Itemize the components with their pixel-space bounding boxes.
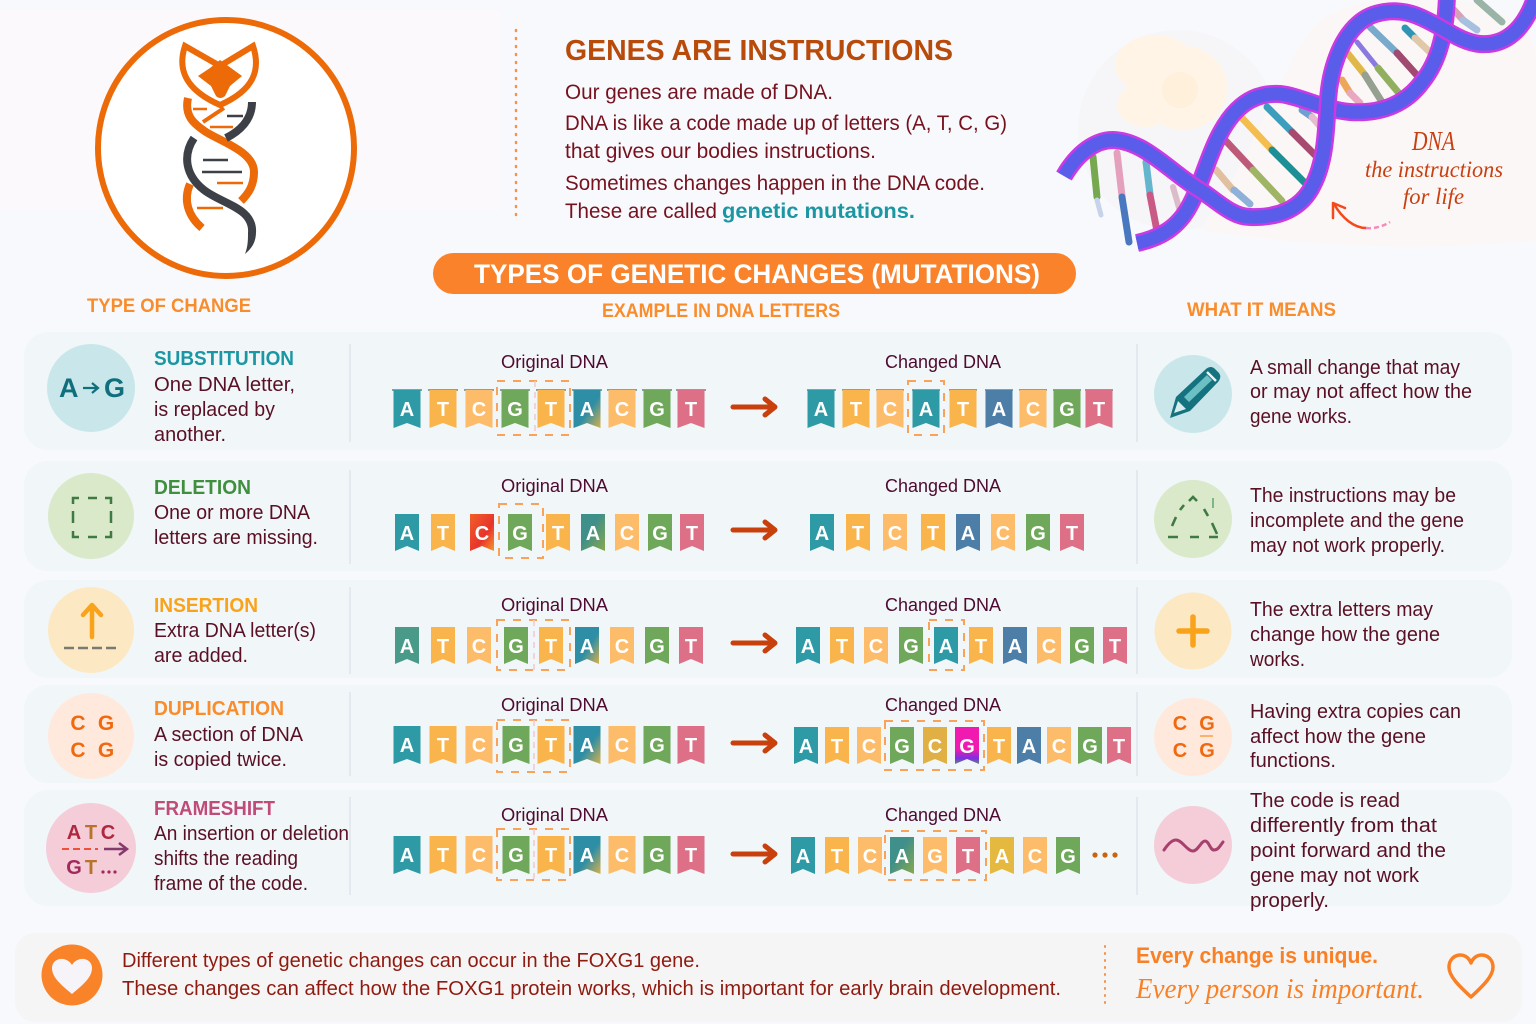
flags: changed sequence: [796, 627, 1127, 664]
text: frameshift meaning: [1250, 790, 1446, 912]
flags: original sequence: A: [400, 845, 414, 867]
flags: original sequence: G: [512, 523, 528, 545]
flags: changed sequence: [794, 727, 1131, 764]
text: deletion meaning: may not work properly.: [1250, 535, 1445, 557]
flags: original sequence: [392, 390, 706, 428]
icon: dashed triangle: [1154, 480, 1232, 558]
flags: changed sequence: A: [1008, 636, 1022, 658]
text: FOXG1 note: [122, 950, 1061, 1000]
flags: original sequence: C: [472, 735, 486, 757]
flags: original sequence: T: [437, 399, 449, 421]
icon: C G pairs meaning: G: [1199, 740, 1215, 762]
icon: reading frame shift: G: [66, 857, 82, 879]
flags: changed sequence: T: [993, 736, 1005, 758]
flags: changed sequence: C: [928, 736, 942, 758]
flags: original sequence: G: [649, 636, 665, 658]
flags: changed sequence: G: [1074, 636, 1090, 658]
flags: original sequence: A: [400, 523, 414, 545]
text: deletion meaning: [1250, 485, 1464, 557]
text: closing message: Every change is unique.: [1136, 943, 1378, 968]
intro text block: Sometimes changes happen in the DNA code.: [565, 172, 985, 195]
flags: original sequence: A: [400, 399, 414, 421]
text: insertion: are added.: [154, 645, 248, 667]
intro text block: DNA is like a code made up of letters (A, T, C, G): [565, 112, 1007, 135]
arrow: [733, 735, 775, 751]
text: deletion: One or more DNA: [154, 502, 311, 524]
text: frameshift meaning: The code is read: [1250, 790, 1400, 812]
flags: changed sequence: T: [1109, 636, 1121, 658]
icon: A to G: G: [104, 373, 125, 403]
text: insertion meaning: change how the gene: [1250, 624, 1440, 646]
text: substitution meaning: [1250, 357, 1472, 428]
flags: original sequence: A: [400, 636, 414, 658]
flags: original sequence: T: [437, 735, 449, 757]
text: closing message: [1135, 943, 1424, 1005]
flags: changed sequence: C: [1052, 736, 1066, 758]
text: deletion: DELETION: [154, 477, 251, 499]
panel: footer: [15, 933, 1522, 1022]
text: deletion: letters are missing.: [154, 527, 318, 549]
text: insertion meaning: works.: [1249, 649, 1305, 671]
icon: A to G: [47, 344, 135, 432]
intro text block: These are called: [565, 200, 717, 223]
flags: changed sequence: C: [862, 736, 876, 758]
flags: changed sequence: T: [831, 736, 843, 758]
flags: original sequence: G: [652, 523, 668, 545]
flags: original sequence: T: [685, 735, 697, 757]
flags: changed sequence: A: [799, 736, 813, 758]
flags: changed sequence: [810, 514, 1084, 551]
highlight: duplicated bases: [885, 721, 984, 770]
flags: changed sequence: G: [1030, 523, 1046, 545]
flags: original sequence: [394, 726, 704, 764]
flags: changed sequence: A: [992, 399, 1006, 421]
highlight: original bases: [497, 829, 570, 880]
highlight: original bases: [497, 720, 570, 772]
flags: changed sequence: T: [975, 636, 987, 658]
text: insertion: INSERTION: [154, 595, 258, 617]
flags: original sequence: A: [580, 399, 594, 421]
text: duplication meaning: [1250, 701, 1461, 772]
highlight: original bases: [497, 620, 570, 670]
flags: changed sequence: T: [1113, 736, 1125, 758]
flags: changed sequence: G: [1060, 846, 1076, 868]
panel: frameshift: [24, 790, 1512, 912]
icon: plus: [1154, 592, 1232, 670]
column heading: example in DNA letters: EXAMPLE IN DNA LETTERS: [602, 301, 840, 322]
icon: reading frame shift: A: [67, 822, 81, 844]
text: substitution: is replaced by: [154, 399, 275, 421]
icon: up arrow on dashed line: [48, 587, 134, 673]
flags: original sequence: T: [437, 845, 449, 867]
flags: original sequence: [395, 627, 703, 664]
arrow: [733, 635, 775, 651]
flags: changed sequence: A: [801, 636, 815, 658]
arrow: [733, 522, 775, 538]
flags: original sequence: [394, 836, 704, 874]
arrow: [733, 846, 775, 862]
flags: original sequence: [395, 514, 704, 551]
highlight: deleted base: [499, 504, 543, 558]
flags: original sequence: G: [508, 636, 524, 658]
icon: reading frame shift: [46, 803, 136, 893]
text: insertion meaning: [1249, 599, 1440, 671]
text: substitution meaning: gene works.: [1250, 406, 1352, 428]
flags: changed sequence: A: [814, 399, 828, 421]
ellipsis dots: [1092, 852, 1118, 858]
icon: C G pairs meaning: C: [1173, 713, 1187, 735]
text: duplication: [154, 698, 304, 771]
flags: changed sequence: C: [1042, 636, 1056, 658]
flags: changed sequence: A: [895, 846, 909, 868]
flags: original sequence: G: [649, 399, 665, 421]
highlight: changed base: [908, 381, 944, 435]
flags: changed sequence: T: [836, 636, 848, 658]
icon: C G pairs: G: [98, 739, 114, 762]
flags: changed sequence: C: [1026, 399, 1040, 421]
intro text block: [565, 35, 1007, 223]
label: original DNA: Original DNA: [501, 695, 608, 715]
flags: original sequence: A: [580, 845, 594, 867]
icon: heart outline: [1449, 955, 1493, 997]
text: deletion meaning: incomplete and the gene: [1250, 510, 1464, 532]
logo: fox and DNA in circle: [98, 20, 354, 276]
panel: insertion: [24, 580, 1512, 678]
text: substitution: another.: [154, 424, 226, 446]
text: substitution: [154, 348, 295, 446]
flags: changed sequence: G: [903, 636, 919, 658]
divider: dotted: [515, 30, 517, 220]
icon: C G pairs: C: [70, 739, 86, 762]
text: duplication: A section of DNA: [154, 724, 304, 746]
illustration: DNA helix with cell: [1064, 0, 1536, 247]
callout: DNA the instructions for life: for life: [1403, 184, 1464, 209]
flags: original sequence: G: [649, 735, 665, 757]
flags: changed sequence: T: [1093, 399, 1105, 421]
flags: original sequence: T: [686, 523, 698, 545]
highlight: shifted bases: [885, 831, 986, 880]
flags: original sequence: A: [580, 636, 594, 658]
text: frameshift: frame of the code.: [154, 873, 308, 895]
label: changed DNA: Changed DNA: [885, 695, 1001, 715]
flags: original sequence: C: [620, 523, 634, 545]
text: deletion: [154, 477, 318, 549]
label: original DNA: Original DNA: [501, 595, 608, 615]
intro text block: Our genes are made of DNA.: [565, 81, 833, 104]
flags: changed sequence: A: [939, 636, 953, 658]
callout: DNA the instructions for life: DNA: [1411, 126, 1455, 156]
flags: original sequence: T: [685, 636, 697, 658]
flags: original sequence: C: [615, 399, 629, 421]
flags: changed sequence: G: [1059, 399, 1075, 421]
flags: changed sequence: A: [1022, 736, 1036, 758]
icon: reading frame shift: T: [85, 857, 97, 879]
flags: original sequence: G: [649, 845, 665, 867]
text: insertion: Extra DNA letter(s): [154, 620, 316, 642]
flags: changed sequence: G: [927, 846, 943, 868]
text: insertion: [154, 595, 316, 667]
icon: wave: [1154, 806, 1232, 884]
flags: original sequence: T: [685, 399, 697, 421]
label: changed DNA: Changed DNA: [885, 595, 1001, 615]
flags: changed sequence: [807, 390, 1113, 428]
flags: changed sequence: A: [995, 846, 1009, 868]
text: frameshift: FRAMESHIFT: [154, 798, 275, 820]
text: frameshift meaning: properly.: [1250, 890, 1329, 912]
panel: deletion: [24, 461, 1512, 571]
flags: changed sequence: T: [927, 523, 939, 545]
flags: changed sequence: T: [852, 523, 864, 545]
flags: original sequence: C: [615, 735, 629, 757]
flags: changed sequence: A: [815, 523, 829, 545]
label: original DNA: Original DNA: [501, 476, 608, 496]
banner: types of genetic changes: [433, 253, 1076, 294]
text: duplication meaning: functions.: [1250, 750, 1336, 772]
icon: C G pairs meaning: G: [1199, 713, 1215, 735]
label: changed DNA: Changed DNA: [885, 476, 1001, 496]
text: frameshift: [154, 798, 349, 895]
icon: heart in circle: [42, 944, 102, 1006]
flags: original sequence: T: [545, 399, 557, 421]
flags: changed sequence: C: [863, 846, 877, 868]
flags: changed sequence: T: [1066, 523, 1078, 545]
column heading: type of change: TYPE OF CHANGE: [87, 296, 251, 317]
flags: original sequence: C: [615, 636, 629, 658]
icon: C G pairs meaning: [1154, 698, 1232, 776]
flags: changed sequence: G: [894, 736, 910, 758]
label: original DNA: Original DNA: [501, 352, 608, 372]
text: closing message: Every person is important.: [1135, 973, 1424, 1005]
text: substitution: One DNA letter,: [154, 374, 295, 396]
callout: DNA the instructions for life: [1333, 126, 1503, 228]
text: frameshift meaning: point forward and the: [1250, 840, 1446, 862]
flags: original sequence: A: [586, 523, 600, 545]
icon: reading frame shift: C: [101, 822, 115, 844]
text: FOXG1 note: These changes can affect how the FOXG1 protein works, which is important for early brain development.: [122, 978, 1061, 1000]
callout: DNA the instructions for life: the instructions: [1365, 157, 1503, 182]
flags: changed sequence: A: [919, 399, 933, 421]
flags: changed sequence: C: [1028, 846, 1042, 868]
text: duplication meaning: Having extra copies can: [1250, 701, 1461, 723]
text: frameshift: An insertion or deletion: [154, 823, 349, 845]
flags: original sequence: G: [507, 399, 523, 421]
panel: substitution: [24, 332, 1512, 450]
icon: C G pairs: C: [70, 712, 86, 735]
text: frameshift: shifts the reading: [154, 848, 298, 870]
banner: types of genetic changes: TYPES OF GENETIC CHANGES (MUTATIONS): [474, 259, 1040, 289]
highlight: original bases: [497, 381, 570, 435]
flags: original sequence: G: [508, 845, 524, 867]
flags: original sequence: T: [437, 523, 449, 545]
icon: C G pairs meaning: C: [1173, 740, 1187, 762]
icon: C G pairs: [48, 693, 134, 779]
flags: original sequence: C: [472, 399, 486, 421]
flags: changed sequence: G: [1082, 736, 1098, 758]
flags: original sequence: A: [580, 735, 594, 757]
text: duplication: is copied twice.: [154, 749, 287, 771]
text: duplication: DUPLICATION: [154, 698, 284, 720]
icon: dashed square: [48, 473, 134, 559]
flags: original sequence: G: [508, 735, 524, 757]
arrow: [733, 399, 775, 415]
text: deletion meaning: The instructions may be: [1250, 485, 1456, 507]
text: duplication meaning: affect how the gene: [1250, 726, 1426, 748]
flags: original sequence: A: [400, 735, 414, 757]
flags: original sequence: T: [552, 523, 564, 545]
text: FOXG1 note: Different types of genetic changes can occur in the FOXG1 gene.: [122, 950, 700, 972]
flags: original sequence: T: [545, 636, 557, 658]
icon: pencil: [1154, 355, 1232, 433]
flags: original sequence: C: [472, 845, 486, 867]
text: frameshift meaning: differently from that: [1250, 815, 1437, 837]
flags: original sequence: T: [437, 636, 449, 658]
flags: changed sequence: C: [883, 399, 897, 421]
text: substitution meaning: A small change that may: [1250, 357, 1460, 379]
flags: changed sequence: T: [962, 846, 974, 868]
heading: genes are instructions: GENES ARE INSTRUCTIONS: [565, 35, 953, 67]
intro text block: that gives our bodies instructions.: [565, 140, 876, 163]
icon: C G pairs: G: [98, 712, 114, 735]
flags: changed sequence: T: [957, 399, 969, 421]
flags: changed sequence: C: [996, 523, 1010, 545]
flags: original sequence: C: [472, 636, 486, 658]
text: substitution meaning: or may not affect how the: [1250, 381, 1472, 403]
flags: original sequence: T: [545, 845, 557, 867]
flags: changed sequence: A: [796, 846, 810, 868]
column heading: what it means: WHAT IT MEANS: [1187, 300, 1336, 321]
flags: changed sequence: T: [831, 846, 843, 868]
label: original DNA: Original DNA: [501, 805, 608, 825]
flags: original sequence: C: [475, 523, 489, 545]
label: changed DNA: Changed DNA: [885, 805, 1001, 825]
intro text block: genetic mutations.: [722, 200, 915, 223]
flags: changed sequence: A: [961, 523, 975, 545]
label: changed DNA: Changed DNA: [885, 352, 1001, 372]
flags: original sequence: T: [545, 735, 557, 757]
flags: changed sequence: C: [888, 523, 902, 545]
text: insertion meaning: The extra letters may: [1250, 599, 1433, 621]
text: frameshift meaning: gene may not work: [1250, 865, 1420, 887]
flags: original sequence: C: [615, 845, 629, 867]
flags: changed sequence: G: [959, 736, 975, 758]
flags: original sequence: T: [685, 845, 697, 867]
flags: changed sequence: C: [869, 636, 883, 658]
icon: A to G: A: [59, 373, 78, 403]
highlight: inserted base: [929, 620, 964, 670]
panel: duplication: [24, 685, 1512, 783]
icon: reading frame shift: T: [85, 822, 97, 844]
flags: changed sequence: T: [850, 399, 862, 421]
flags: changed sequence: [791, 837, 1080, 874]
text: substitution: SUBSTITUTION: [154, 348, 294, 370]
